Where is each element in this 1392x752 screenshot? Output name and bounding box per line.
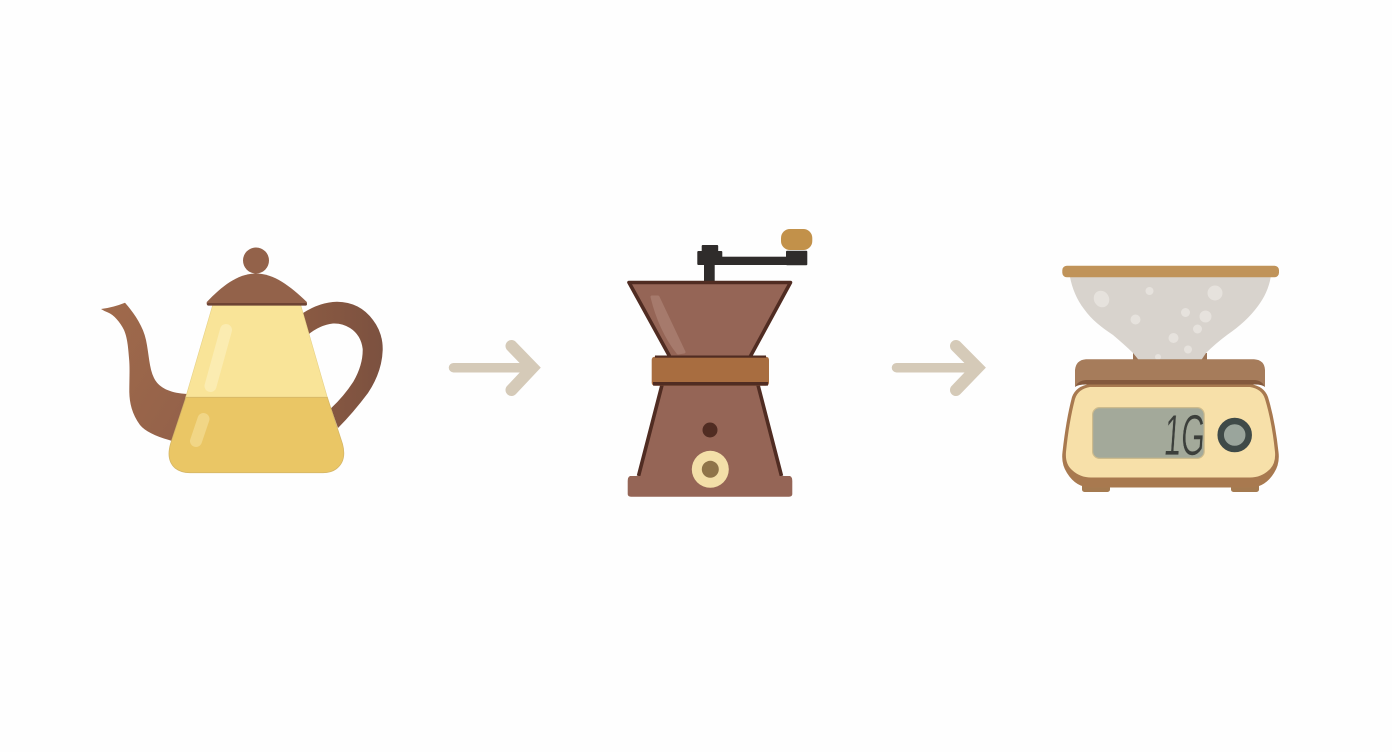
scale bowl — [1070, 277, 1271, 360]
arrow: kettle to grinder — [454, 346, 532, 390]
icon: coffee grinder — [628, 229, 812, 497]
kettle spout — [101, 303, 187, 442]
bowl stem — [1133, 353, 1207, 360]
kettle knob — [243, 248, 269, 274]
kettle body upper glass — [186, 305, 328, 398]
kettle glass highlights — [196, 330, 226, 441]
grinder hopper highlight — [652, 297, 684, 353]
scale top platform — [1075, 359, 1265, 387]
arrow: grinder to scale — [896, 346, 978, 390]
grinder base — [638, 385, 782, 477]
grinder foot — [628, 476, 792, 497]
scale feet — [1082, 482, 1259, 492]
scale button — [1221, 421, 1249, 449]
scale display — [1093, 408, 1204, 458]
kettle lid — [207, 274, 307, 306]
grinder crank handle — [697, 245, 807, 282]
grinder hopper — [629, 282, 790, 357]
bowl bubbles — [1091, 286, 1222, 360]
grinder dial — [692, 451, 729, 488]
grinder crank knob — [781, 229, 812, 250]
scale plate — [1062, 266, 1279, 277]
icon: kitchen scale — [1062, 266, 1279, 492]
kettle liquid — [169, 397, 344, 473]
icon: kettle — [101, 248, 383, 473]
scale body casing — [1062, 384, 1279, 488]
display reading: 1G — [1162, 403, 1207, 468]
platform shadow — [1075, 380, 1265, 387]
scale body face — [1066, 387, 1275, 478]
kettle lid shadow — [207, 303, 307, 306]
kettle handle — [303, 302, 383, 428]
grinder hole — [702, 422, 718, 438]
grinder band — [652, 356, 769, 386]
